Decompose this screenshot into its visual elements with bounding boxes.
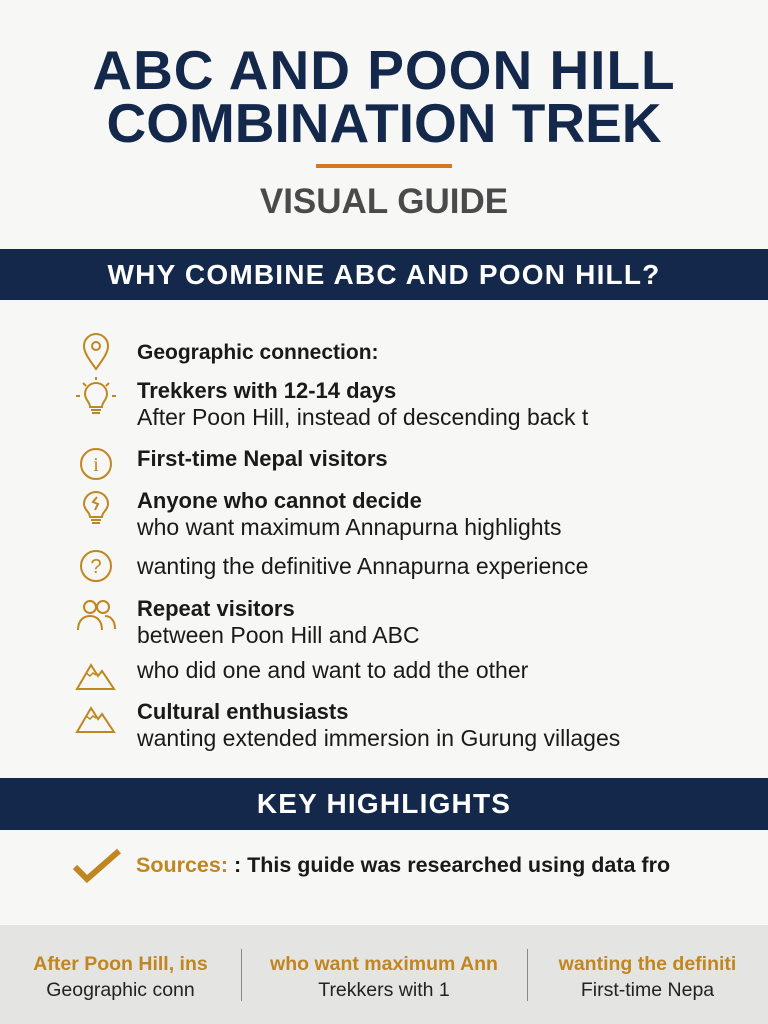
item: cultural: Cultural enthusiasts bbox=[137, 699, 348, 724]
item: repeat visitors: Repeat visitors bbox=[137, 596, 295, 621]
section header: why combine: WHY COMBINE ABC AND POON HILL? bbox=[108, 259, 660, 290]
title: COMBINATION TREK bbox=[106, 92, 662, 154]
item: definitive: wanting the definitive Annapurna experience bbox=[137, 553, 588, 579]
item: anyone: Anyone who cannot decide bbox=[137, 488, 422, 513]
highlight: sources bbox=[72, 848, 670, 883]
subtitle: VISUAL GUIDE bbox=[260, 182, 508, 221]
item: anyone bbox=[83, 488, 561, 540]
icon: checkmark bbox=[72, 848, 121, 883]
stat 2: Trekkers with 1 bbox=[318, 979, 450, 1001]
item: anyone: who want maximum Annapurna highlights bbox=[137, 514, 561, 540]
stat 2: who want maximum Ann bbox=[270, 953, 498, 975]
stat 2 bbox=[270, 953, 498, 1001]
item: repeat visitors bbox=[77, 596, 420, 648]
icon: bulb bbox=[76, 377, 116, 414]
item: geographic bbox=[83, 333, 379, 371]
item: did one bbox=[75, 657, 528, 690]
icon: mountain bbox=[75, 663, 116, 690]
highlight: sources: Sources: : This guide was researched using data fro bbox=[136, 853, 670, 877]
item: geographic: Geographic connection: bbox=[137, 341, 379, 364]
icon: question bbox=[80, 550, 112, 582]
item: first-time bbox=[80, 446, 388, 480]
stat 1: Geographic conn bbox=[46, 979, 195, 1001]
icon: bulb 2 bbox=[83, 491, 109, 524]
icon: people bbox=[77, 600, 116, 630]
section header: why combine bbox=[0, 249, 768, 300]
footer stats bbox=[0, 925, 768, 1024]
icon: info bbox=[80, 448, 112, 480]
orange underline bbox=[316, 164, 452, 168]
item: cultural bbox=[75, 699, 620, 751]
stat 1: After Poon Hill, ins bbox=[33, 953, 208, 975]
icon: question: ? bbox=[90, 556, 102, 578]
item: first-time: First-time Nepal visitors bbox=[137, 446, 388, 471]
icon: info: i bbox=[93, 454, 99, 476]
icon: mountain 2 bbox=[75, 706, 116, 733]
item: cultural: wanting extended immersion in Gurung villages bbox=[137, 725, 620, 751]
section header: key highlights bbox=[0, 778, 768, 830]
stat 3: wanting the definiti bbox=[559, 953, 736, 975]
list of reasons bbox=[75, 333, 620, 751]
section header: key highlights: KEY HIGHLIGHTS bbox=[257, 788, 511, 819]
title bbox=[92, 39, 676, 154]
icon: pin bbox=[83, 333, 109, 371]
item: did one: who did one and want to add the other bbox=[137, 657, 528, 683]
stat 3 bbox=[558, 953, 736, 1001]
stat 1 bbox=[33, 953, 208, 1001]
item: trekkers: Trekkers with 12-14 days bbox=[137, 378, 396, 403]
item: repeat visitors: between Poon Hill and ABC bbox=[137, 622, 420, 648]
item: trekkers bbox=[76, 377, 588, 430]
title: ABC AND POON HILL bbox=[92, 39, 676, 101]
stat 3: First-time Nepa bbox=[581, 979, 714, 1001]
item: trekkers: After Poon Hill, instead of descending back t bbox=[137, 404, 588, 430]
